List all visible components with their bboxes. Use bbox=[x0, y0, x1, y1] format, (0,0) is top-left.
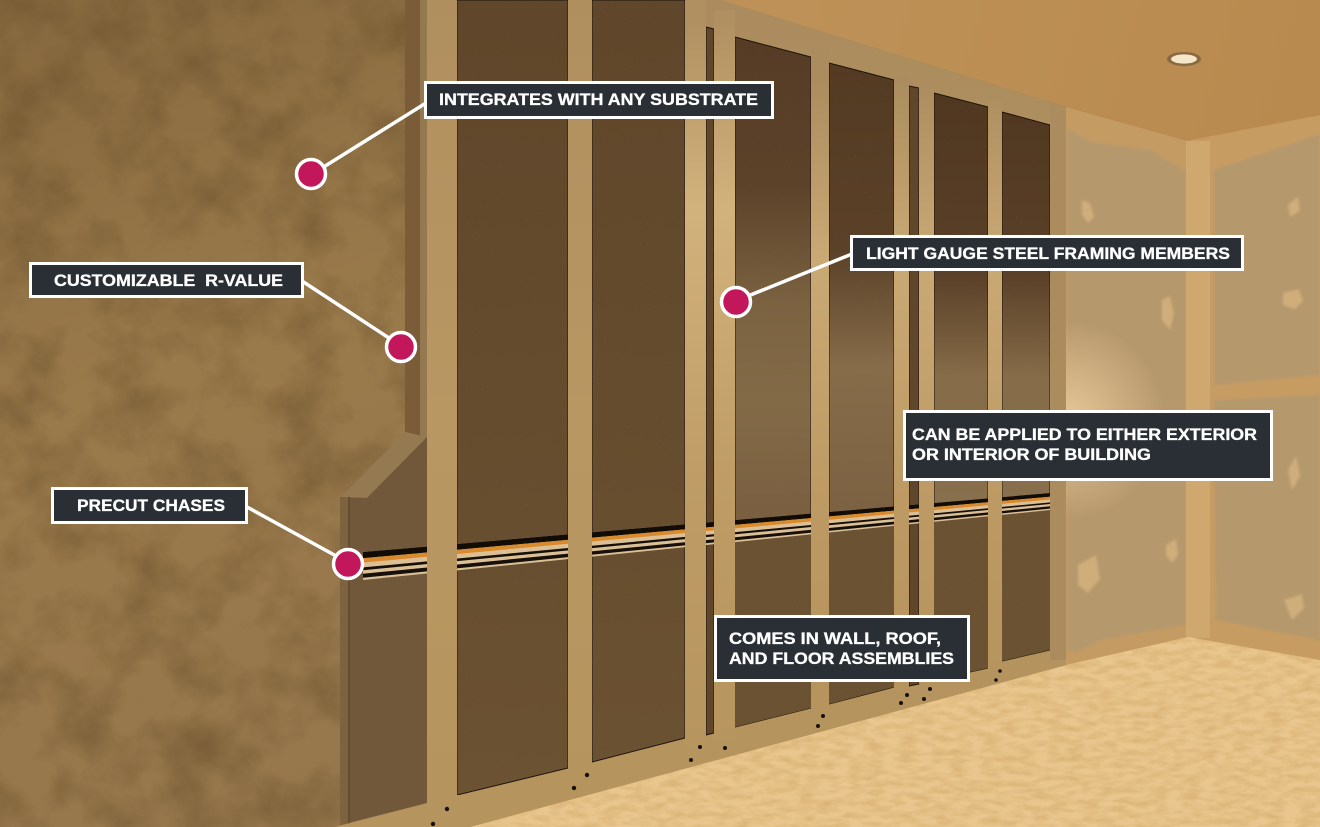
leader line bbox=[302, 281, 392, 340]
marker dot bbox=[722, 288, 750, 316]
right wall section bbox=[1066, 107, 1188, 667]
OSB floor bbox=[470, 637, 1320, 827]
leader line bbox=[322, 103, 426, 168]
label bbox=[852, 236, 1242, 270]
steel studs bbox=[427, 0, 1066, 827]
callout: can be applied to either exterior or interior of building: OR INTERIOR OF BUILDING bbox=[912, 446, 1151, 464]
label bbox=[426, 82, 772, 118]
label: CUSTOMIZABLE R-VALUE bbox=[54, 272, 283, 290]
label: PRECUT CHASES bbox=[77, 497, 225, 515]
marker dot bbox=[386, 332, 416, 362]
foam column at wall step bbox=[405, 0, 427, 437]
precut chase with conduit bbox=[363, 493, 1050, 580]
leader line bbox=[748, 254, 852, 296]
marker dot bbox=[334, 550, 362, 578]
panel 4 bbox=[735, 37, 811, 727]
ceiling bbox=[720, 0, 1320, 141]
callout: can be applied to either exterior or interior of building: CAN BE APPLIED TO EITHER EXTERIOR bbox=[912, 426, 1257, 444]
fastener holes bbox=[431, 669, 1002, 826]
lower foam block with chase return bbox=[340, 432, 427, 825]
callout: can be applied to either exterior or interior of building bbox=[904, 412, 1272, 480]
callout: integrates with any substrate bbox=[296, 82, 772, 188]
panel 7 bbox=[934, 93, 988, 680]
left foam wall bbox=[0, 0, 430, 827]
ceiling light bbox=[1167, 52, 1201, 66]
panel 8 bbox=[1002, 112, 1050, 661]
far right wall bbox=[1186, 115, 1320, 660]
callout: customizable R-value bbox=[30, 264, 416, 362]
marker dot bbox=[296, 160, 326, 188]
callout: precut chases bbox=[52, 488, 362, 578]
label bbox=[30, 264, 302, 296]
callout: comes in wall, roof, and floor assemblies: AND FLOOR ASSEMBLIES bbox=[729, 650, 954, 668]
panel 1 bbox=[457, 0, 568, 795]
leader line bbox=[247, 507, 338, 557]
steel framing background and tracks bbox=[335, 0, 1066, 827]
callout: comes in wall, roof, and floor assemblies bbox=[716, 616, 968, 680]
narrow panel 6 bbox=[909, 86, 919, 686]
narrow panel 3 bbox=[706, 27, 714, 735]
label: INTEGRATES WITH ANY SUBSTRATE bbox=[439, 91, 758, 109]
callout: light gauge steel framing members bbox=[722, 236, 1242, 316]
callout: comes in wall, roof, and floor assemblies: COMES IN WALL, ROOF, bbox=[729, 630, 941, 648]
lower panel tone below chase bbox=[735, 507, 1050, 727]
label bbox=[52, 488, 246, 522]
label: LIGHT GAUGE STEEL FRAMING MEMBERS bbox=[866, 245, 1230, 263]
insulation panels bbox=[457, 0, 1050, 795]
panel 5 bbox=[829, 63, 894, 704]
panel 2 bbox=[592, 0, 685, 762]
